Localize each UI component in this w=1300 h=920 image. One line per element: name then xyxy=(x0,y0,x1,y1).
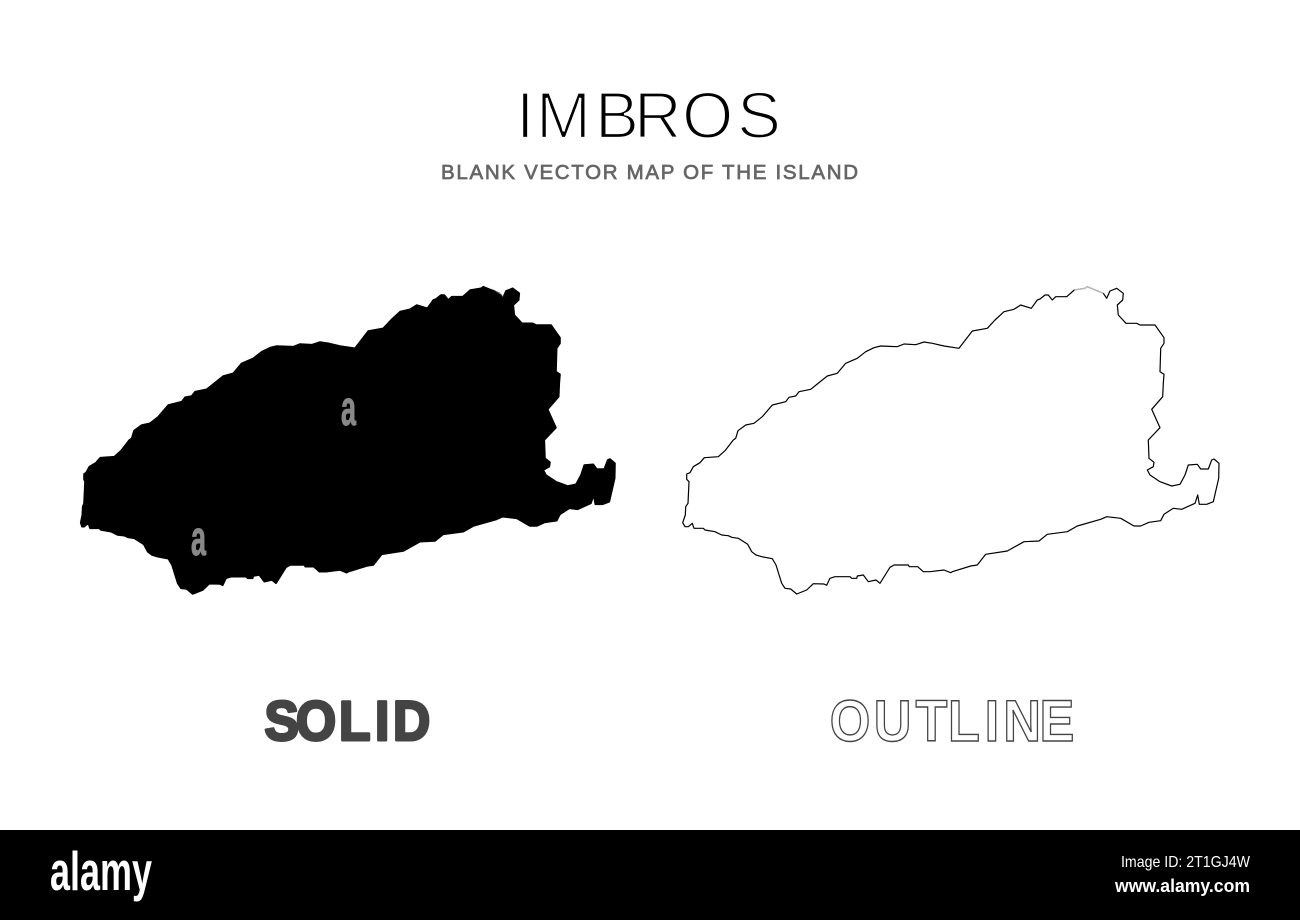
solid label: SOLID xyxy=(265,690,430,752)
footer logo: alamy xyxy=(50,840,152,902)
faded coast section xyxy=(1074,287,1103,293)
solid map of the island xyxy=(81,287,615,594)
watermark letter: a xyxy=(191,512,206,566)
watermark letter: a xyxy=(341,382,356,436)
subtitle: BLANK VECTOR MAP OF THE ISLAND xyxy=(441,161,858,184)
footer bar xyxy=(0,830,1300,920)
website: www.alamy.com xyxy=(1114,875,1250,896)
watermark sliver xyxy=(491,288,505,297)
image id: Image ID: 2T1GJ4W xyxy=(1121,854,1251,871)
outline map of the island xyxy=(683,287,1219,594)
outline label: OUTLINE xyxy=(830,688,1074,754)
title: IMBROS xyxy=(516,78,781,152)
